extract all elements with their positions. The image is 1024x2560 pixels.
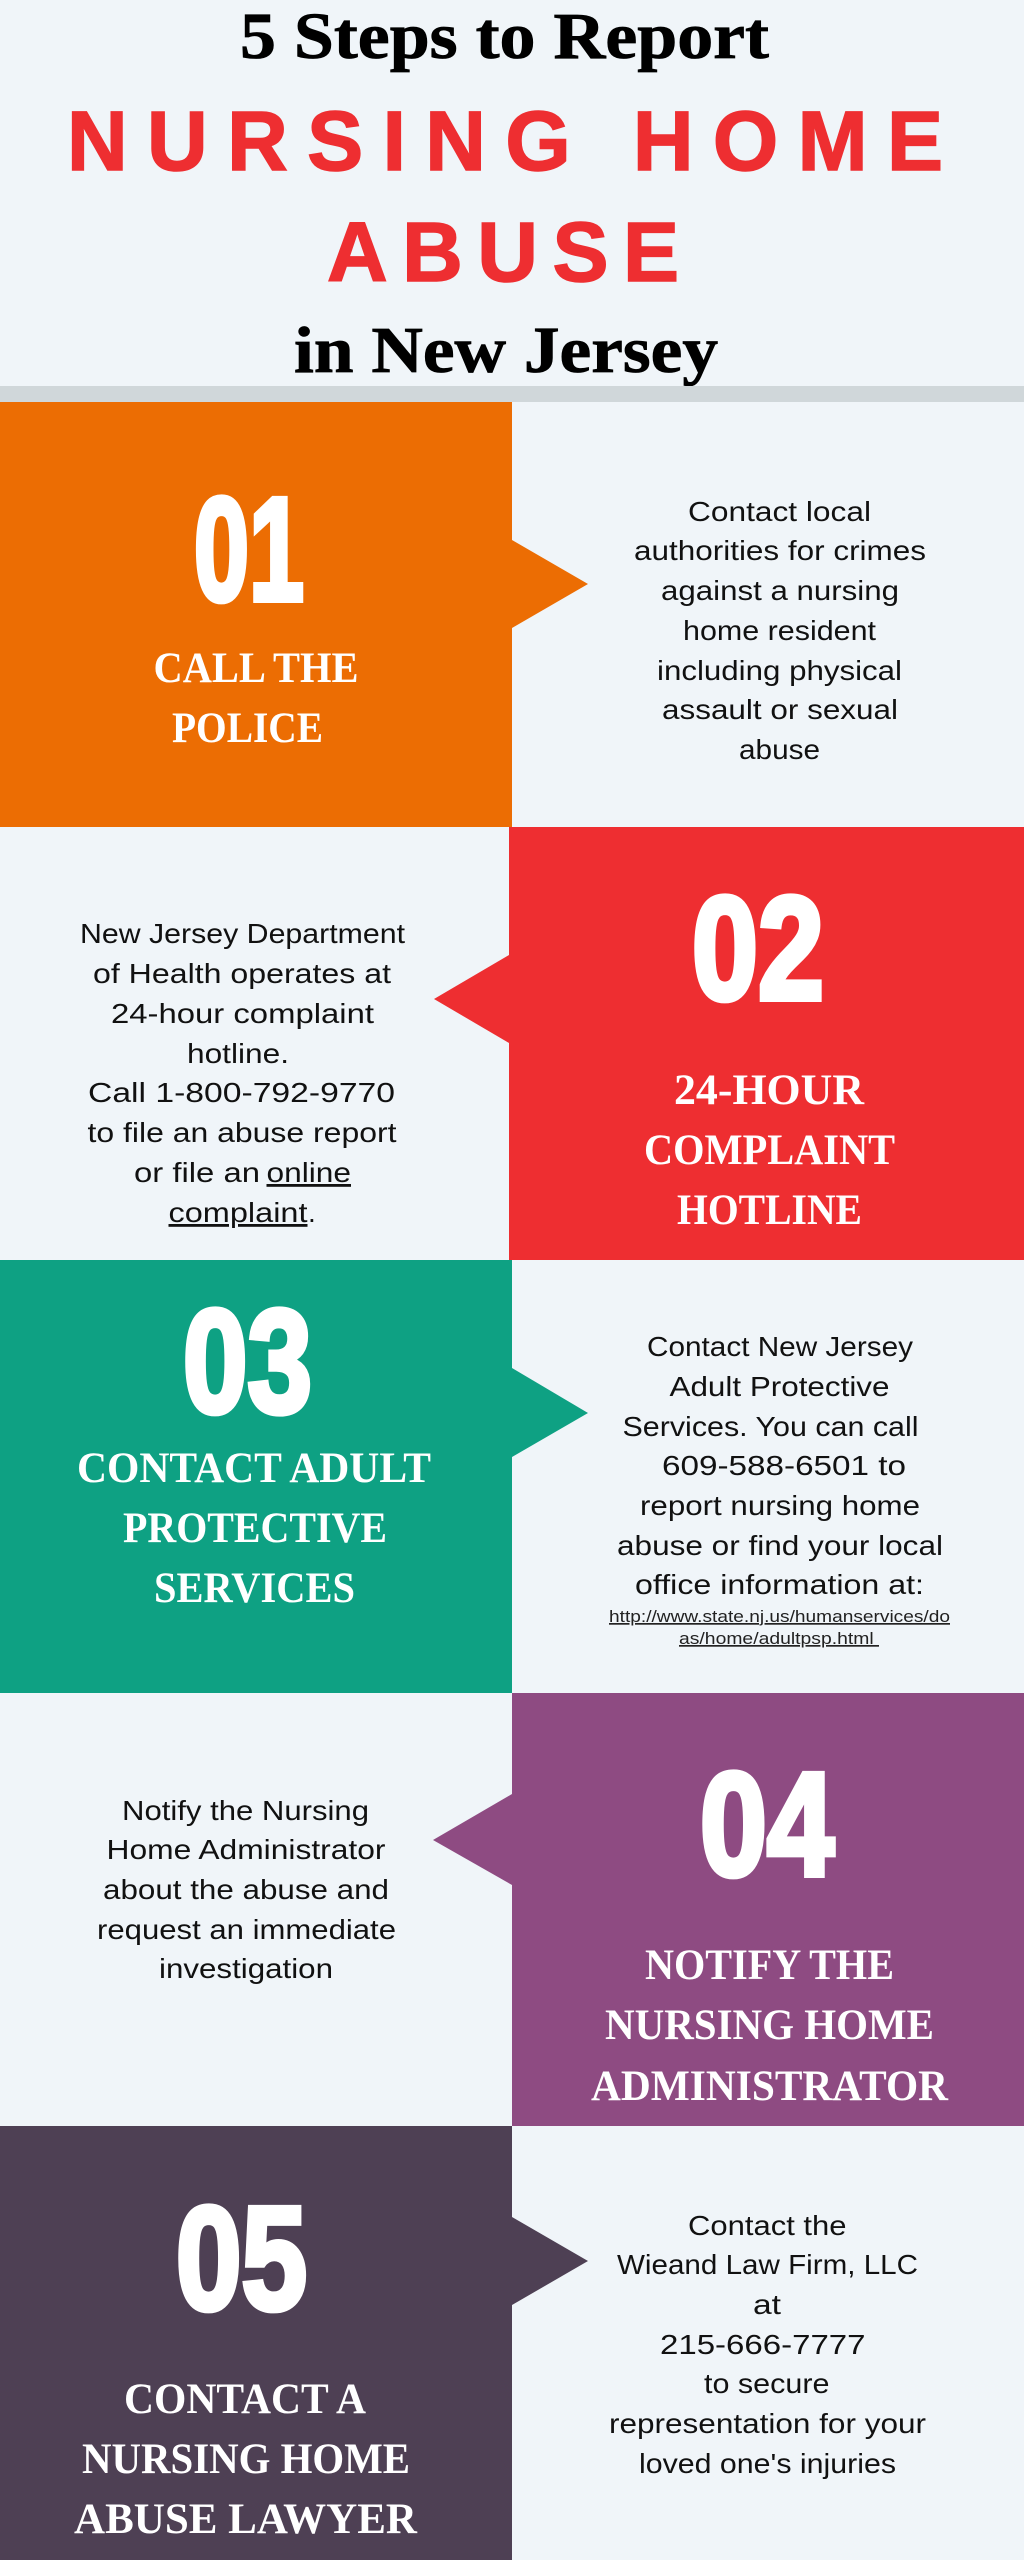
text: step 2 description: online (266, 1157, 351, 1188)
text: step 3 description: report nursing home (640, 1490, 920, 1521)
heading: 24-hour complaint hotline: COMPLAINT (644, 1127, 895, 1174)
text: step 2 description: or file an (134, 1157, 260, 1188)
text: step 1 description: abuse (739, 734, 820, 765)
text: step 2 description: 24-hour complaint (111, 998, 374, 1029)
heading: 24-hour complaint hotline: 24-HOUR (674, 1067, 865, 1114)
heading: 24-hour complaint hotline: HOTLINE (677, 1187, 862, 1234)
heading: notify the nursing home administrator (591, 1942, 949, 2110)
text: step 5 description (609, 2210, 926, 2479)
panel: step 1 call the police (0, 402, 926, 827)
text: step 1 description: against a nursing (661, 575, 899, 606)
text: step 5 description: representation for your (609, 2408, 926, 2439)
text: step 3 description: Services. You can call (622, 1411, 918, 1442)
arrow: step 5 (512, 2217, 588, 2305)
heading: contact a nursing home abuse lawyer: CONTACT A (124, 2376, 366, 2423)
heading: notify the nursing home administrator: NURSING HOME (605, 2002, 934, 2049)
number 03: 03 (183, 1280, 312, 1444)
heading: contact adult protective services: CONTACT ADULT (77, 1445, 431, 1492)
text: step 2 description: complaint (168, 1197, 308, 1228)
heading: contact a nursing home abuse lawyer: ABUSE LAWYER (74, 2496, 418, 2543)
text: step 5 description: 215-666-7777 (660, 2329, 866, 2360)
text: step 3 description (609, 1331, 950, 1648)
number 02: 02 (692, 867, 824, 1031)
panel: step 3 adult protective services (0, 1260, 950, 1693)
heading: call the police: POLICE (172, 705, 323, 752)
panel: step 4 notify the administrator (97, 1693, 1024, 2126)
text: step 3 description: Contact New Jersey (647, 1331, 913, 1362)
heading: call the police (154, 645, 358, 752)
heading: contact a nursing home abuse lawyer: NURSING HOME (82, 2436, 410, 2483)
text: step 5 description: Wieand Law Firm, LLC (617, 2249, 918, 2280)
arrow: step 3 (512, 1368, 588, 1457)
heading: notify the nursing home administrator: NOTIFY THE (645, 1942, 894, 1989)
text: step 1 description: Contact local (688, 496, 871, 527)
arrow: step 2 (434, 955, 509, 1043)
text: step 2 description: . (308, 1197, 316, 1228)
title (67, 0, 943, 387)
heading: notify the nursing home administrator: ADMINISTRATOR (591, 2063, 949, 2110)
heading: 24-hour complaint hotline (644, 1067, 895, 1234)
panel: step 5 contact a lawyer (0, 2126, 926, 2560)
text: step 5 description: at (753, 2289, 781, 2320)
text: step 5 description: loved one's injuries (639, 2448, 896, 2479)
heading: contact adult protective services (77, 1445, 431, 1612)
text: step 4 description (97, 1795, 396, 1984)
text: step 4 description: Notify the Nursing (122, 1795, 369, 1826)
title: in New Jersey (294, 314, 718, 387)
text: step 4 description: about the abuse and (103, 1874, 389, 1905)
text: step 5 description: Contact the (688, 2210, 846, 2241)
text: step 2 description: of Health operates at (93, 958, 391, 989)
text: step 3 description: as/home/adultpsp.html (679, 1629, 879, 1648)
text: step 1 description: assault or sexual (662, 694, 898, 725)
text: step 2 description: hotline. (187, 1038, 289, 1069)
title: NURSING HOME (67, 94, 943, 188)
text: step 2 description (80, 918, 405, 1228)
text: step 3 description: office information at: (635, 1569, 924, 1600)
text: step 1 description: authorities for crimes (634, 535, 926, 566)
text: step 5 description: to secure (704, 2368, 830, 2399)
title: ABUSE (327, 205, 679, 299)
heading: contact adult protective services: SERVICES (154, 1565, 355, 1612)
text: step 4 description: investigation (159, 1953, 333, 1984)
panel: step 2 complaint hotline (80, 827, 1024, 1260)
text: step 3 description: http://www.state.nj.us/humanservices/do (609, 1607, 950, 1626)
heading: call the police: CALL THE (154, 645, 358, 692)
number 04: 04 (700, 1743, 834, 1907)
text: step 2 description: Call 1-800-792-9770 (88, 1077, 395, 1108)
arrow: step 1 (512, 540, 588, 628)
text: step 1 description: home resident (683, 615, 876, 646)
text: step 3 description: abuse or find your local (617, 1530, 943, 1561)
text: step 1 description: including physical (657, 655, 902, 686)
text: step 2 description: New Jersey Department (80, 918, 405, 949)
text: step 3 description: Adult Protective (670, 1371, 890, 1402)
number 05: 05 (176, 2177, 307, 2341)
text: step 4 description: Home Administrator (106, 1834, 386, 1865)
title: 5 Steps to Report (240, 0, 769, 73)
heading: contact adult protective services: PROTECTIVE (123, 1505, 387, 1552)
text: step 3 description: 609-588-6501 to (662, 1450, 906, 1481)
text: step 1 description (634, 496, 926, 765)
text: step 4 description: request an immediate (97, 1914, 396, 1945)
heading: contact a nursing home abuse lawyer (74, 2376, 418, 2543)
text: step 2 description: to file an abuse report (88, 1117, 397, 1148)
arrow: step 4 (433, 1794, 512, 1885)
number 01: 01 (194, 468, 304, 632)
